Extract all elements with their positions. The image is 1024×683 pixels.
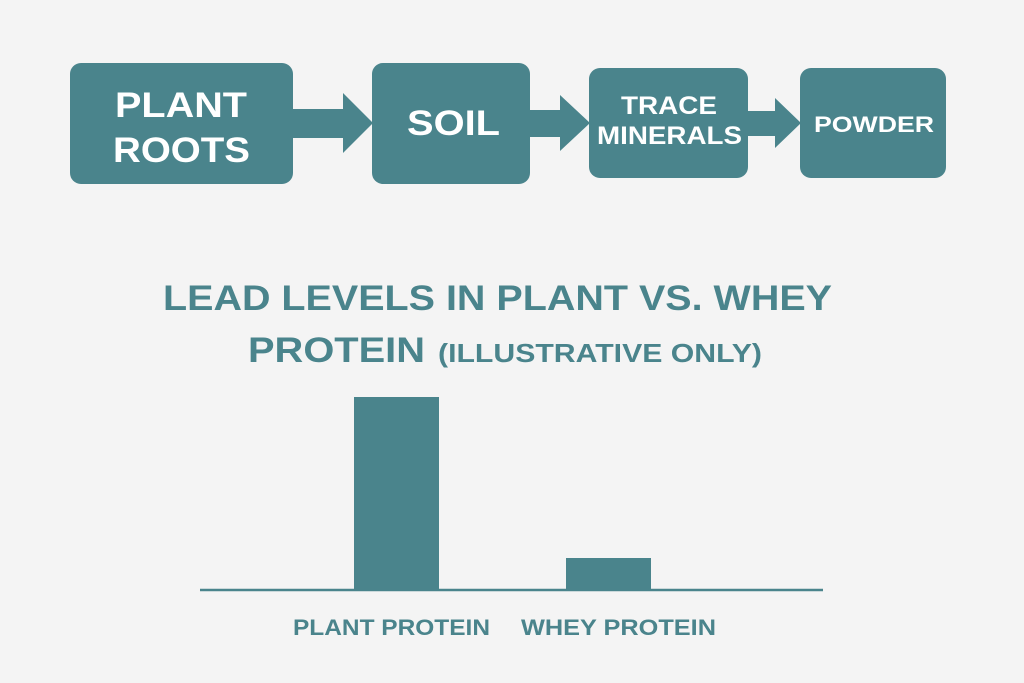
- box: soil: SOIL: [407, 104, 500, 143]
- arrow: trace minerals to powder: [747, 98, 801, 148]
- chart title: (ILLUSTRATIVE ONLY): [438, 338, 762, 368]
- arrow: roots to soil: [292, 93, 373, 153]
- chart title: LEAD LEVELS IN PLANT VS. WHEY: [163, 279, 832, 318]
- label: plant protein: PLANT PROTEIN: [293, 615, 490, 640]
- chart title: [163, 279, 832, 370]
- label: whey protein: WHEY PROTEIN: [521, 615, 716, 640]
- flow diagram: [70, 63, 946, 184]
- box: plant roots: PLANT: [115, 86, 247, 125]
- box: plant roots: [70, 63, 293, 184]
- box: powder: [800, 68, 946, 178]
- bar: plant protein: [354, 397, 439, 591]
- box: plant roots: ROOTS: [113, 131, 250, 170]
- box: soil: [372, 63, 530, 184]
- box: trace minerals: MINERALS: [597, 122, 742, 150]
- box: trace minerals: [589, 68, 748, 178]
- box: powder: POWDER: [814, 112, 934, 137]
- bar chart: [200, 397, 823, 640]
- chart title: PROTEIN: [248, 331, 425, 370]
- arrow: soil to trace minerals: [529, 95, 590, 151]
- box: trace minerals: TRACE: [621, 92, 717, 120]
- bar: whey protein: [566, 558, 651, 591]
